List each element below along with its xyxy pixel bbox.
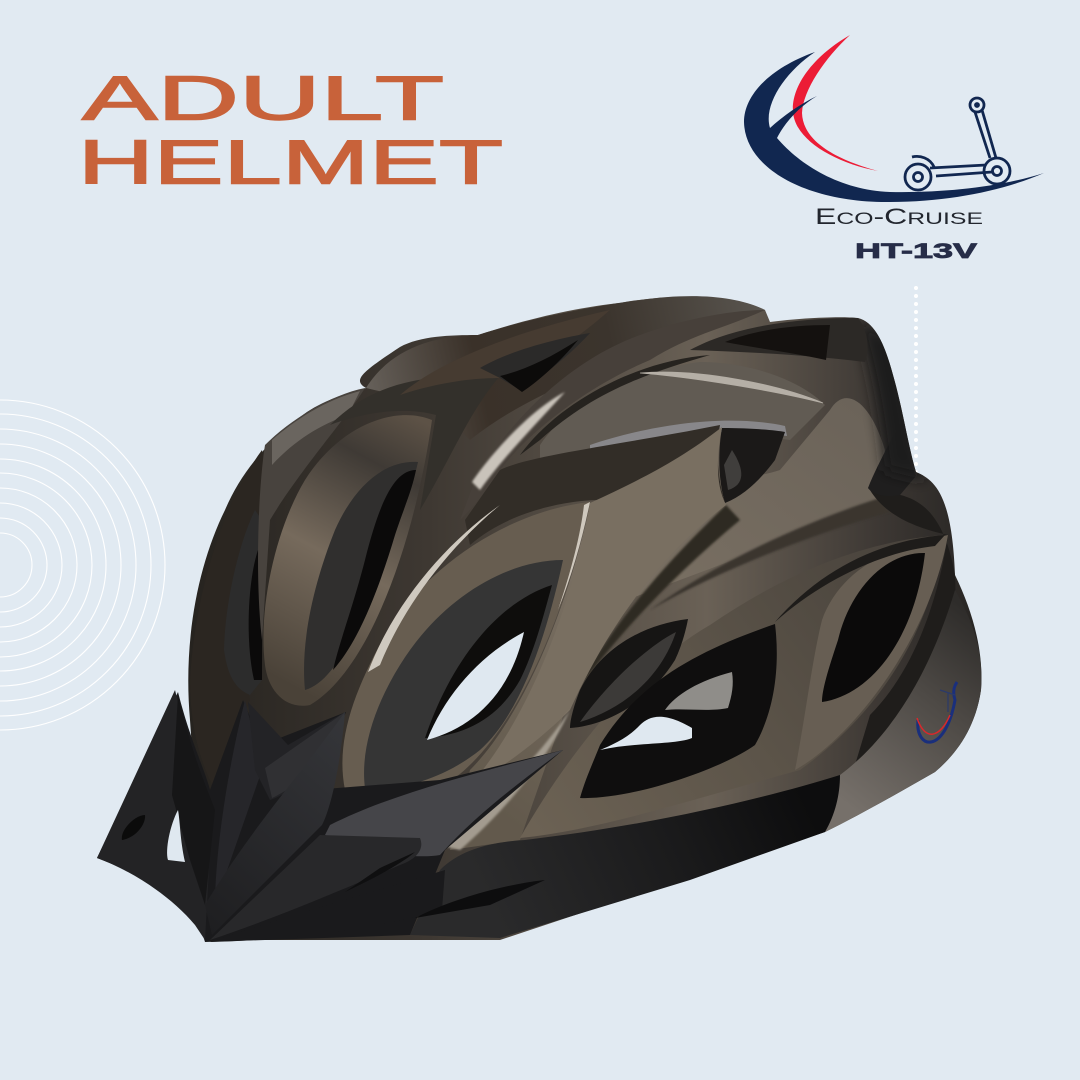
upper right vent	[690, 318, 868, 362]
rear dark ridge	[855, 490, 955, 765]
side vent see-through	[600, 717, 692, 750]
upper vent opening	[719, 428, 785, 503]
chevron facet	[265, 712, 345, 798]
top vent opening	[500, 340, 578, 392]
rear shell section	[825, 590, 981, 832]
lower panel streak	[440, 710, 570, 850]
upper side vent	[719, 428, 785, 503]
upper crease line	[650, 498, 890, 610]
visor vent 1	[122, 815, 145, 840]
foam	[224, 510, 262, 695]
top dark vent	[400, 310, 610, 395]
second vent socket	[263, 415, 432, 706]
upper dark ridge	[465, 425, 725, 545]
upper chevron	[248, 702, 345, 800]
strip slot	[415, 880, 545, 918]
upper diagonal ridge	[460, 310, 765, 520]
visor base	[97, 692, 563, 942]
title: ADULT	[82, 64, 444, 134]
top vent foam	[480, 333, 590, 390]
slit shine	[580, 632, 676, 722]
upper vent mesh	[724, 450, 741, 490]
second vent opening	[333, 470, 416, 670]
logo brand name: E CO -C RUISE	[815, 204, 983, 229]
big vent foam	[364, 560, 563, 789]
visor vent 2	[167, 810, 185, 862]
central bronze band	[450, 398, 885, 850]
side vent body	[580, 624, 777, 798]
upper right opening	[725, 325, 830, 360]
side vent	[580, 624, 777, 798]
diagonal panel highlight	[558, 502, 590, 610]
long grey blade	[325, 750, 563, 856]
small oval slit	[570, 619, 688, 728]
top vent band	[400, 310, 610, 395]
rear dark mesh vent	[868, 432, 916, 496]
left foam vent	[224, 510, 262, 695]
centre spike	[215, 700, 262, 905]
foam strip	[590, 421, 787, 452]
left dark band	[190, 450, 268, 790]
rear vent rim	[795, 535, 948, 770]
visor slot	[345, 852, 415, 892]
lower front panel	[210, 870, 445, 942]
big vent interior	[425, 585, 552, 738]
upper panel highlight	[640, 372, 823, 403]
logo swoosh: navy	[744, 52, 1044, 202]
hole	[249, 550, 262, 680]
big vent see-through hole	[427, 632, 524, 740]
rear dark bezel	[775, 535, 945, 622]
logo swoosh: red	[793, 35, 878, 171]
visor left wing	[97, 690, 210, 940]
dotted vertical line	[914, 288, 918, 480]
second vent	[263, 415, 432, 706]
small helmet logo	[917, 682, 957, 742]
big vent socket	[342, 502, 590, 803]
logo scooter	[905, 98, 1010, 190]
visor	[97, 690, 563, 942]
upper right rim	[690, 318, 868, 362]
big vent	[342, 502, 590, 803]
side vent mesh	[665, 672, 733, 710]
top band	[366, 296, 765, 440]
ridge highlight streak	[472, 392, 565, 490]
slit body	[570, 619, 688, 728]
title	[78, 64, 503, 198]
central panel	[470, 427, 726, 785]
lower bronze band	[520, 535, 945, 838]
soft crease shadow across central panel	[570, 505, 740, 700]
rear side vent	[775, 535, 948, 770]
model number: HT-13V	[855, 240, 977, 263]
second vent foam	[304, 462, 418, 690]
upper side panel	[540, 362, 825, 460]
lower visor blade	[210, 835, 421, 940]
upper side shade	[520, 355, 710, 455]
brand logo	[744, 35, 1044, 263]
decorative concentric circles	[0, 400, 165, 730]
right edge shadow	[855, 318, 925, 480]
dark arc ridge	[330, 376, 500, 510]
helmet shell	[188, 297, 981, 940]
bronze highlight streak	[368, 505, 500, 672]
visor left front panel	[172, 695, 215, 905]
side black strip	[410, 775, 840, 938]
left grey ridge	[258, 388, 365, 640]
rear vent opening	[822, 553, 925, 702]
title: HELMET	[78, 128, 503, 198]
helmet	[97, 296, 981, 942]
grey ridge highlight	[272, 391, 360, 465]
large grey facet	[205, 712, 345, 935]
